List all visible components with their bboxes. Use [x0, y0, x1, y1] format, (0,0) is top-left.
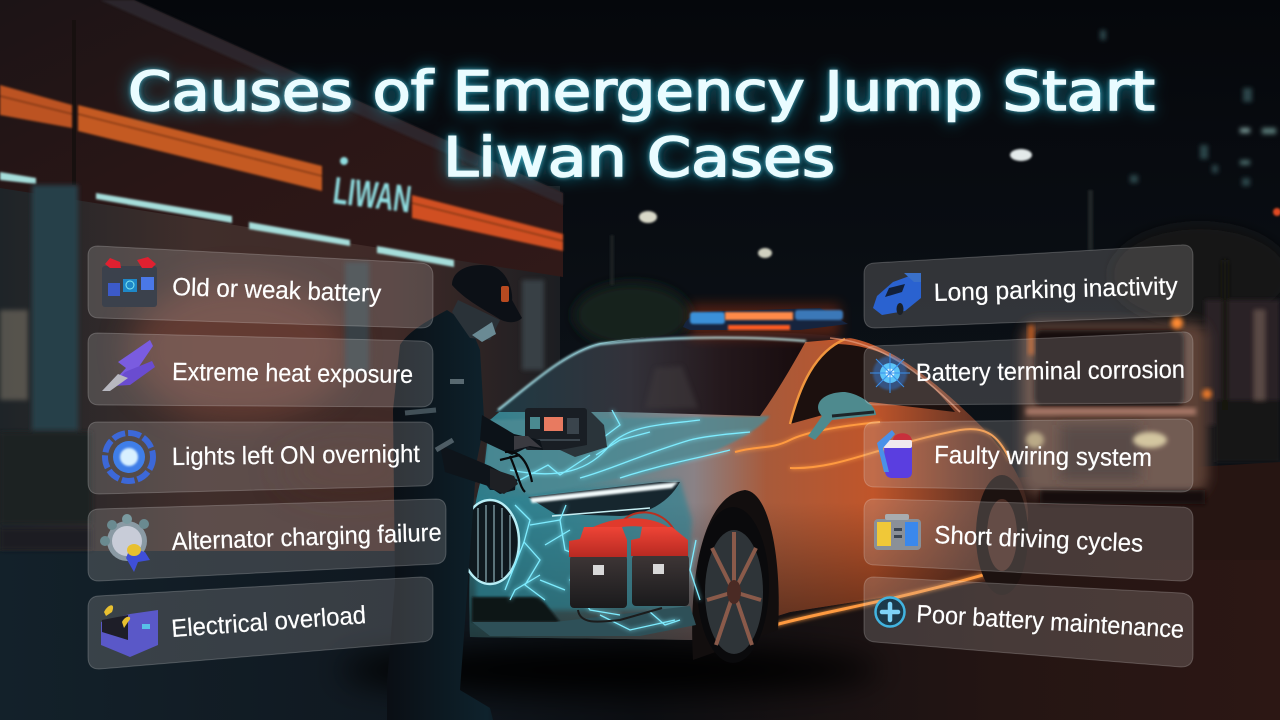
roof [596, 332, 852, 345]
wall at right behind vehicle [1205, 260, 1280, 462]
car body [469, 333, 1028, 640]
background tower windows [1100, 30, 1276, 186]
card: lights left on overnight: Lights left ON overnight [172, 440, 420, 471]
reflective stripes [405, 410, 436, 413]
rear vehicle at right [1022, 317, 1212, 504]
card: battery terminal corrosion: Battery terminal corrosion [916, 356, 1185, 387]
title: Liwan Cases [443, 126, 835, 189]
front fascia teal [476, 480, 692, 610]
station facade [0, 0, 563, 277]
technician body [387, 310, 520, 720]
icon: purple box [101, 605, 158, 657]
technician [387, 265, 543, 720]
street lamps [543, 149, 1280, 357]
station orange stripes [0, 85, 563, 251]
lower bumper recess [472, 597, 560, 622]
card: alternator charging failure: Alternator charging failure [171, 519, 442, 556]
grille [461, 500, 519, 584]
card: faulty wiring system: Faulty wiring system [934, 441, 1152, 472]
car: sedan with lightning [340, 304, 1028, 694]
roof edge light [498, 338, 806, 410]
technician arms [480, 415, 543, 455]
emergency light bar [683, 304, 848, 338]
station columns [0, 185, 544, 550]
icon: blue car [873, 273, 921, 315]
card: electrical overload: Electrical overload [170, 601, 367, 643]
trees [574, 225, 1280, 347]
card: lights left on overnight [88, 422, 433, 494]
panel: right causes list [864, 245, 1193, 667]
icon: glowing gear [105, 433, 153, 481]
card: old or weak battery [88, 246, 433, 328]
side window [790, 344, 955, 424]
card: poor battery maintenance: Poor battery maintenance [916, 600, 1185, 644]
hood highlight [485, 416, 770, 495]
cables in hand [500, 452, 532, 492]
twin battery [569, 512, 689, 622]
card: poor battery maintenance [864, 577, 1193, 667]
car shadow [340, 646, 880, 694]
icon: fuse cup [877, 430, 912, 478]
card: long parking inactivity [864, 245, 1193, 328]
card: extreme heat exposure [88, 333, 433, 407]
front seats [645, 366, 698, 408]
icon: purple clamp [102, 340, 155, 391]
road [0, 545, 1280, 720]
card: extreme heat exposure: Extreme heat exposure [172, 358, 413, 389]
card: faulty wiring system [864, 419, 1193, 492]
charger device on hood [525, 408, 607, 457]
headlight [528, 482, 680, 516]
title [128, 60, 1155, 189]
icon: alternator [100, 514, 150, 572]
technician cap [452, 265, 522, 322]
card: long parking inactivity: Long parking inactivity [933, 272, 1179, 307]
icon: battery gauges [874, 514, 921, 550]
card: short driving cycles: Short driving cycles [934, 521, 1144, 558]
mirror [808, 392, 876, 440]
station interior [0, 186, 560, 551]
windshield [495, 337, 806, 416]
icon: plus circle [876, 598, 904, 626]
card: electrical overload [88, 577, 433, 669]
title: Causes of Emergency Jump Start [128, 60, 1155, 123]
card: old or weak battery: Old or weak battery [172, 273, 382, 308]
wheel arch [692, 490, 779, 660]
orange door light lines [735, 422, 1010, 625]
card: short driving cycles [864, 499, 1193, 581]
sign: LIWAN [331, 157, 413, 221]
icon: battery [102, 257, 157, 307]
lower bumper [472, 606, 696, 636]
sign: LIWAN: LIWAN [331, 170, 413, 221]
icon: blue burst [870, 353, 910, 393]
canopy lights [0, 172, 454, 267]
front wheel [697, 507, 769, 663]
card: battery terminal corrosion [864, 332, 1193, 405]
cyan lightning [505, 410, 750, 630]
rear wheel [976, 475, 1028, 595]
card: alternator charging failure [88, 499, 446, 581]
panel: left causes list [88, 246, 446, 669]
technician face [452, 300, 500, 340]
